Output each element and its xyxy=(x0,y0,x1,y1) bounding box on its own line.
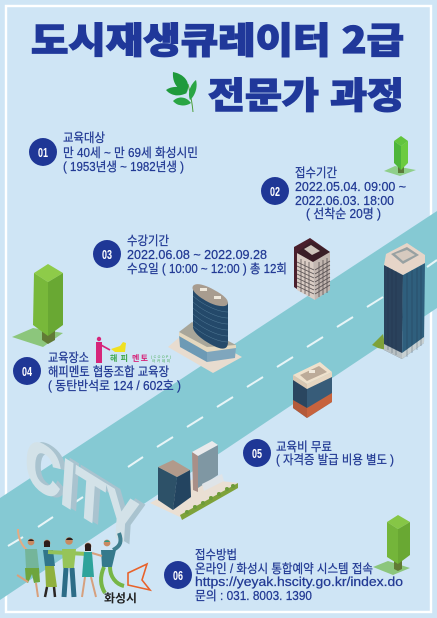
logo: Happy Mento coop: 아카데미 xyxy=(152,358,170,364)
info 02: application period: 2022.06.03. 18:00 xyxy=(295,194,394,208)
logo: Hwaseong city xyxy=(104,564,150,606)
logo: Happy Mento coop: 멘토 xyxy=(132,353,149,364)
tree: large left xyxy=(12,264,63,347)
building: mid brick base office xyxy=(293,362,332,418)
tree: bottom right xyxy=(373,515,410,575)
info 03: course period: 03 xyxy=(102,247,112,262)
info 06: how to apply: https://yeyak.hscity.go.kr/index.do xyxy=(195,575,403,589)
info 04: venue: ( 동탄반석로 124 / 602호 ) xyxy=(48,379,181,393)
building group: twin towers on plaza xyxy=(150,441,238,520)
tree: top right xyxy=(384,136,416,176)
building: oval tower with podium xyxy=(168,284,242,373)
info 02: application period: 접수기간 xyxy=(295,166,337,180)
info 06: how to apply xyxy=(164,548,403,603)
info 06: how to apply: 06 xyxy=(173,568,183,583)
building: tall glass tower xyxy=(372,243,425,359)
info 02: application period xyxy=(261,166,406,221)
info 04: venue xyxy=(13,351,181,393)
info 02: application period: 02 xyxy=(270,184,280,199)
road xyxy=(0,211,437,600)
title line 2: 전문가 과정 xyxy=(208,67,404,119)
info 01: target: 교육대상 xyxy=(63,131,105,145)
info 03: course period: 수강기간 xyxy=(127,234,169,248)
info 02: application period: 2022.05.04. 09:00 ~ xyxy=(295,180,406,194)
info 06: how to apply: 문의 : 031. 8003. 1390 xyxy=(195,589,312,603)
info 01: target xyxy=(29,131,198,174)
logo: Happy Mento coop: 해피 xyxy=(110,353,128,364)
building: cream office tower xyxy=(294,238,330,300)
info 01: target: 만 40세 ~ 만 69세 화성시민 xyxy=(63,146,198,160)
info 03: course period xyxy=(93,234,287,276)
info 04: venue: 해피멘토 협동조합 교육장 xyxy=(48,365,169,379)
icon: leaf sprig xyxy=(166,72,197,112)
illustration: group of people xyxy=(17,529,124,597)
info 01: target: 01 xyxy=(38,145,48,160)
info 02: application period: ( 선착순 20명 ) xyxy=(306,207,381,221)
info 03: course period: 2022.06.08 ~ 2022.09.28 xyxy=(127,248,267,262)
info 05: fee xyxy=(243,439,394,467)
info 05: fee: 05 xyxy=(252,446,262,461)
logo: Happy Mento coop: (COOP) xyxy=(151,355,171,359)
info 05: fee: 교육비 무료 xyxy=(276,440,332,454)
title line 1: 도시재생큐레이터 2급 xyxy=(31,12,404,64)
info 06: how to apply: 온라인 / 화성시 통합예약 시스템 접속 xyxy=(195,561,373,576)
info 05: fee: ( 자격증 발급 비용 별도 ) xyxy=(276,453,394,467)
logo: Hwaseong city: 화성시 xyxy=(104,590,137,606)
CITY 3D lettering: CITY xyxy=(28,423,145,564)
CITY 3D lettering: CITY xyxy=(23,422,140,564)
info 06: how to apply: 접수방법 xyxy=(195,548,237,562)
info 04: venue: 04 xyxy=(22,364,33,379)
info 03: course period: 수요일 ( 10:00 ~ 12:00 ) 총 12회 xyxy=(127,262,287,276)
info 01: target: ( 1953년생 ~ 1982년생 ) xyxy=(63,160,184,174)
logo: Happy Mento coop xyxy=(96,337,171,364)
info 04: venue: 교육장소 xyxy=(48,351,89,365)
